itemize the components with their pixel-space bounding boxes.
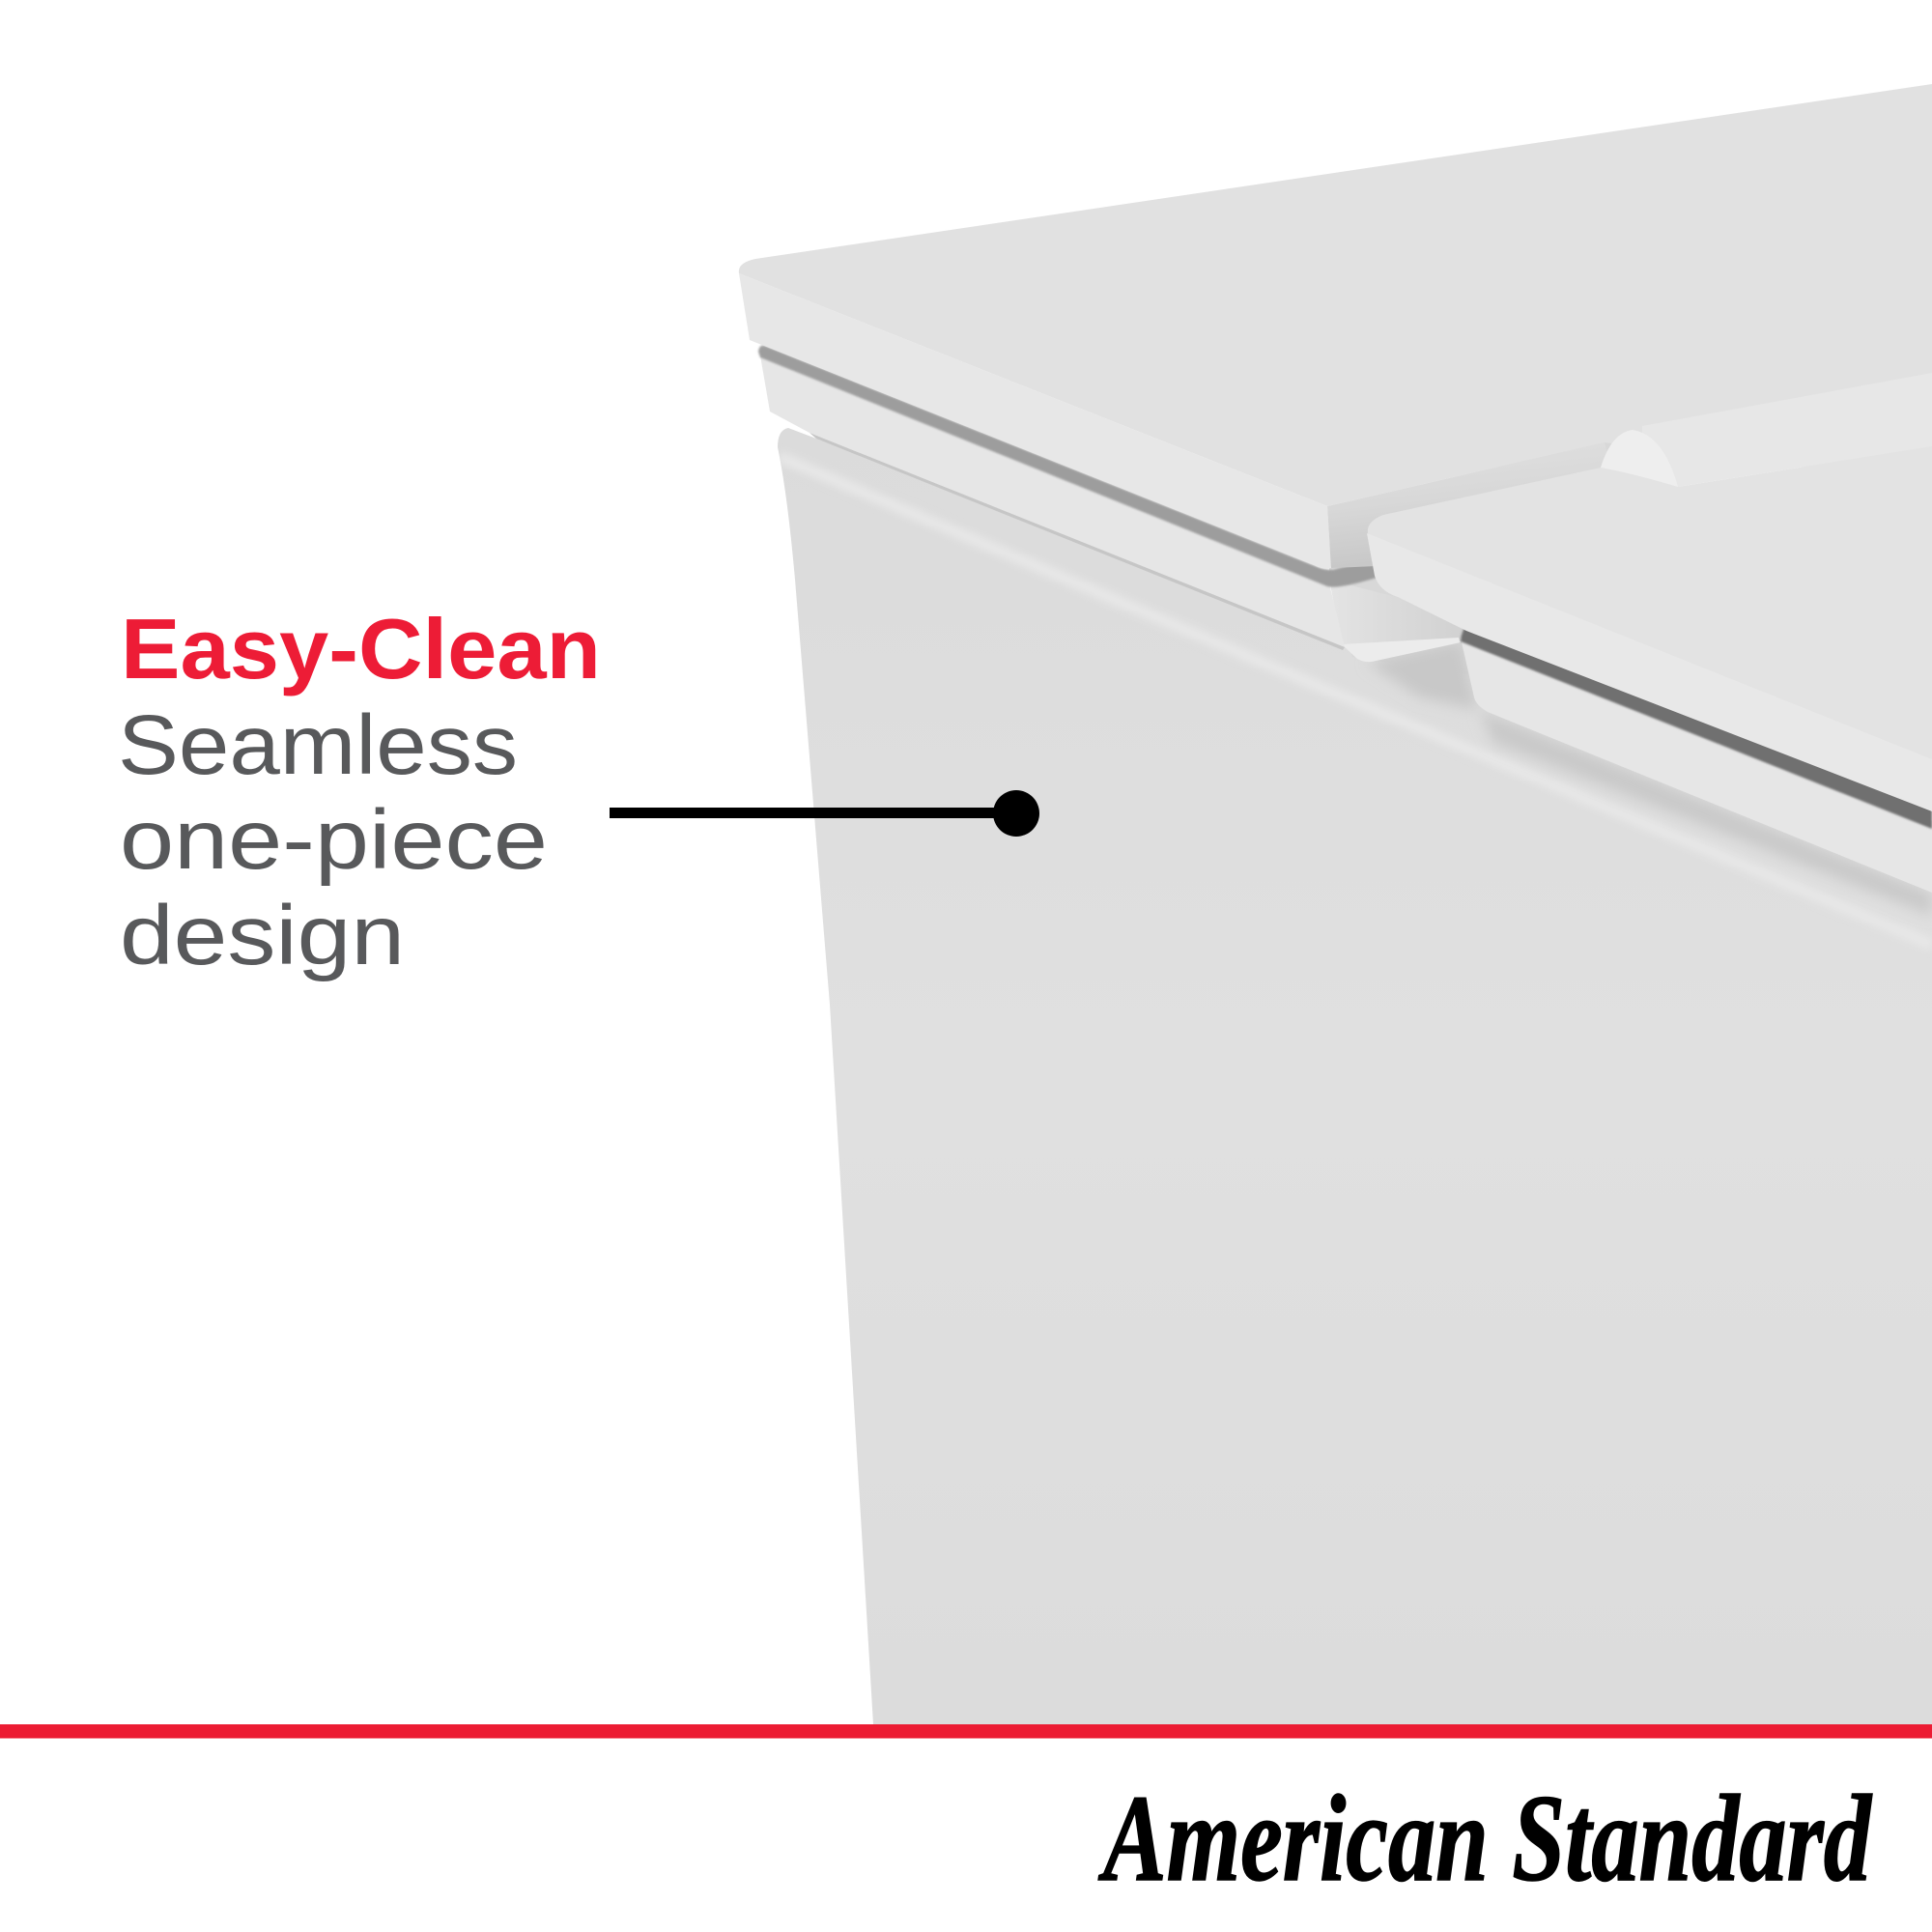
tank top ridge highlight: [780, 457, 1932, 945]
rear lid gap: [758, 346, 1377, 587]
rear lid lower block: [760, 355, 1478, 662]
product: toilet tank and lid: [739, 84, 1932, 1724]
tank body: [778, 428, 1932, 1724]
rear lid side face: [1327, 442, 1613, 568]
body text: Seamless: [118, 698, 518, 792]
callout text: [118, 601, 601, 982]
lid underside backing: [1329, 440, 1681, 676]
rear lid top surface: [739, 84, 1932, 506]
front lid top surface: [1368, 446, 1932, 765]
front lid front face: [1367, 533, 1932, 811]
lid handle bump and band: [1601, 373, 1932, 487]
rear lid front face: [739, 273, 1331, 569]
callout leader line and dot: [610, 790, 1039, 837]
body text: one-piece: [120, 793, 548, 887]
body text: design: [120, 889, 405, 982]
heading: Easy-Clean: Easy-Clean: [121, 601, 601, 696]
front lid dark gap: [1461, 628, 1932, 829]
red divider bar: [0, 1724, 1932, 1739]
front lid lower block: [1461, 638, 1932, 893]
body text: [118, 698, 548, 982]
